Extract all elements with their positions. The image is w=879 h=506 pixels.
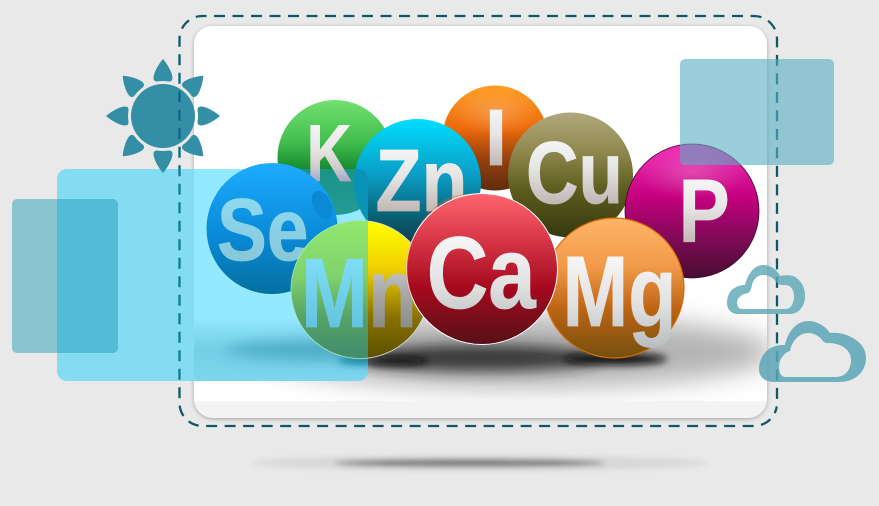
tinted sphere: Se [206, 163, 338, 294]
tinted sphere: Mn: Mn [301, 238, 417, 348]
icon: sun [106, 59, 220, 173]
sphere: P [625, 144, 759, 278]
sphere: Mg: Mg [562, 236, 676, 348]
sphere: Ca: Ca [427, 216, 537, 330]
translucent teal panel: top right [680, 59, 834, 165]
tinted sphere: Se: Se [217, 180, 308, 279]
sphere: Mn [291, 220, 429, 358]
tinted card area with spheres [194, 169, 368, 381]
dashed frame: top and right [180, 16, 777, 426]
sphere: K: K [306, 109, 352, 199]
sphere: I: I [485, 93, 507, 182]
element spheres [206, 86, 759, 358]
sphere: P: P [679, 162, 730, 262]
sphere: K [278, 100, 392, 215]
sphere: Ca [406, 194, 558, 344]
tinted sphere: K [300, 169, 368, 215]
translucent cyan panel: large [57, 169, 368, 381]
sphere: Mn: Mn [301, 238, 417, 348]
tinted sphere: Zn [354, 169, 368, 220]
ground shadow [252, 455, 708, 471]
sphere: Cu [508, 112, 633, 238]
dashed frame: bottom and left [180, 16, 777, 426]
tinted sphere: Mn [290, 220, 368, 359]
icon: large cloud [759, 321, 866, 382]
panel: white card [194, 26, 767, 418]
dashed frame segment under cyan panel [178, 169, 181, 380]
sphere: Se [206, 163, 338, 294]
dashed frame segment over sun [178, 72, 181, 169]
translucent teal panel: small left [12, 199, 118, 353]
sphere floor shadows [265, 316, 775, 388]
sphere: Cu: Cu [526, 123, 623, 222]
tinted sphere: K: K [306, 109, 352, 199]
sphere: I [442, 86, 548, 190]
sphere: Zn [354, 119, 481, 246]
icon: small cloud [727, 265, 805, 314]
sphere: Mg [544, 218, 684, 358]
sphere: Zn: Zn [376, 131, 468, 230]
